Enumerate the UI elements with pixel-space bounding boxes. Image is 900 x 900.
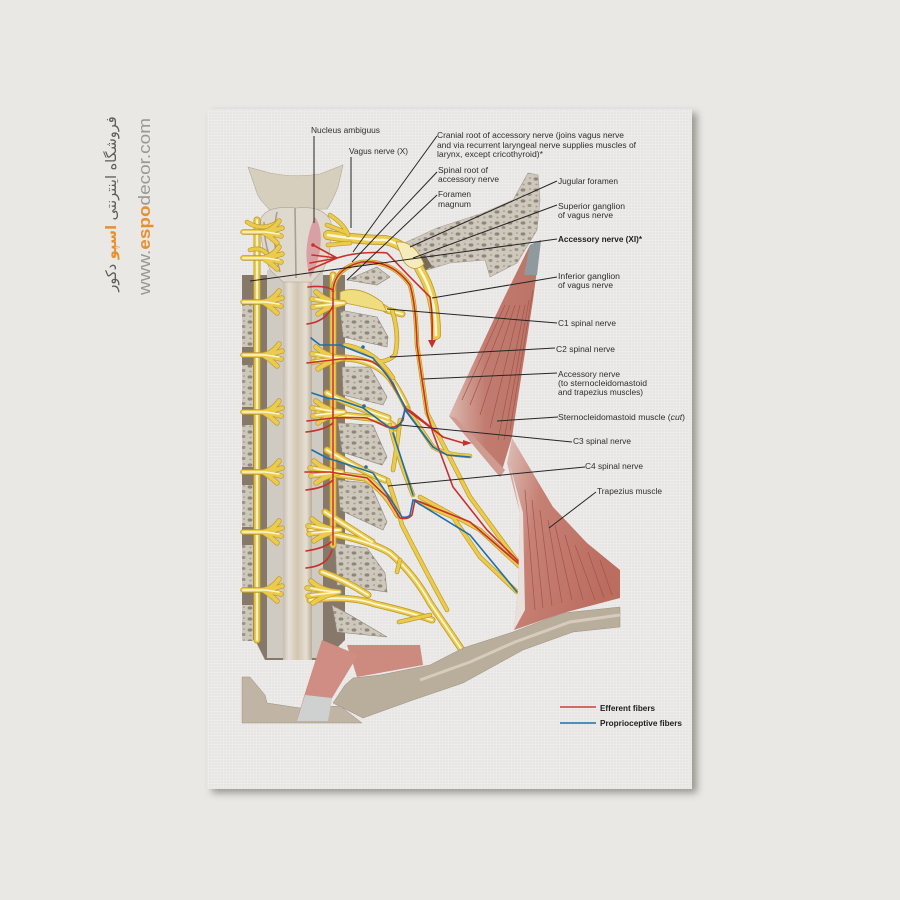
label: superior ganglion: Superior ganglion bbox=[558, 201, 625, 211]
medulla bbox=[261, 207, 331, 282]
brand text: website: www.espodecor.com bbox=[136, 118, 154, 296]
nucleus ambiguus shape bbox=[306, 217, 321, 278]
label: foramen magnum: magnum bbox=[438, 199, 471, 209]
superior ganglion bbox=[396, 242, 424, 269]
inferior ganglion bbox=[340, 290, 387, 312]
medulla shading bbox=[264, 208, 296, 278]
clavicle bbox=[333, 607, 620, 718]
canvas weave texture bbox=[207, 109, 692, 789]
spinal canal backdrop bbox=[242, 275, 345, 660]
sternocleidomastoid muscle bbox=[449, 240, 541, 477]
trapezius muscle bbox=[507, 438, 620, 630]
label: vagus nerve: Vagus nerve (X) bbox=[349, 146, 408, 156]
temporal bone bbox=[400, 173, 540, 277]
label: nucleus ambiguus: Nucleus ambiguus bbox=[311, 125, 381, 135]
label: trapezius: Trapezius muscle bbox=[597, 486, 662, 496]
legend: proprioceptive swatch bbox=[560, 722, 596, 724]
right vertebrae bbox=[332, 267, 390, 637]
label: spinal root: Spinal root of bbox=[438, 165, 489, 175]
label: cranial root: Cranial root of accessory nerve (joins vagus nerve bbox=[437, 130, 624, 140]
label: sternocleidomastoid: Sternocleidomastoid muscle (cut) bbox=[558, 412, 685, 422]
label: C3: C3 spinal nerve bbox=[573, 436, 631, 446]
label: spinal root: accessory nerve bbox=[438, 174, 499, 184]
left vertebra cuts bbox=[242, 305, 253, 641]
lower muscle stub left bbox=[297, 640, 358, 720]
lower muscle stub tendon bbox=[297, 695, 332, 721]
spinal cord with meninges bbox=[267, 270, 323, 658]
skull base ring bbox=[248, 165, 343, 210]
jugular foramen shadow bbox=[413, 255, 432, 271]
sternum bbox=[242, 677, 362, 723]
efferent fibers bbox=[305, 243, 536, 572]
lower muscle stub right bbox=[347, 645, 423, 677]
label: cranial root: larynx, except cricothyroid)* bbox=[437, 149, 544, 159]
label: accessory nerve XI: Accessory nerve (XI)* bbox=[558, 234, 643, 244]
illustration: spinal column and nerves bbox=[242, 165, 540, 660]
label: accessory nerve branch: Accessory nerve bbox=[558, 369, 620, 379]
yellow nerves bbox=[247, 215, 520, 650]
label: cranial root: and via recurrent laryngeal nerve supplies muscles of bbox=[437, 140, 637, 150]
nerve root fans left bbox=[243, 221, 282, 601]
label: accessory nerve branch: (to sternocleidomastoid bbox=[558, 378, 647, 388]
label: superior ganglion: of vagus nerve bbox=[558, 210, 613, 220]
label: accessory nerve branch: and trapezius muscles) bbox=[558, 387, 643, 397]
legend: proprioceptive label: Proprioceptive fibers bbox=[600, 718, 682, 728]
efferent arrowheads bbox=[428, 340, 536, 572]
labels bbox=[311, 125, 685, 496]
legend bbox=[560, 703, 682, 728]
label: jugular foramen: Jugular foramen bbox=[558, 176, 618, 186]
legend: efferent swatch bbox=[560, 706, 596, 708]
proprioceptive fibers bbox=[311, 338, 517, 592]
label: C4: C4 spinal nerve bbox=[585, 461, 643, 471]
brand text: Persian store name: فروشگاه اینترنتی اسپو دکور bbox=[103, 116, 120, 293]
canvas panel bbox=[207, 109, 692, 789]
legend: efferent label: Efferent fibers bbox=[600, 703, 655, 713]
nerve root fans right bbox=[307, 292, 344, 603]
clavicle highlight bbox=[420, 615, 620, 680]
label: C1: C1 spinal nerve bbox=[558, 318, 616, 328]
label: inferior ganglion: of vagus nerve bbox=[558, 280, 613, 290]
label: foramen magnum: Foramen bbox=[438, 189, 471, 199]
leader lines bbox=[250, 136, 596, 528]
label: C2: C2 spinal nerve bbox=[556, 344, 615, 354]
central cord bbox=[283, 270, 312, 660]
label: inferior ganglion: Inferior ganglion bbox=[558, 271, 620, 281]
